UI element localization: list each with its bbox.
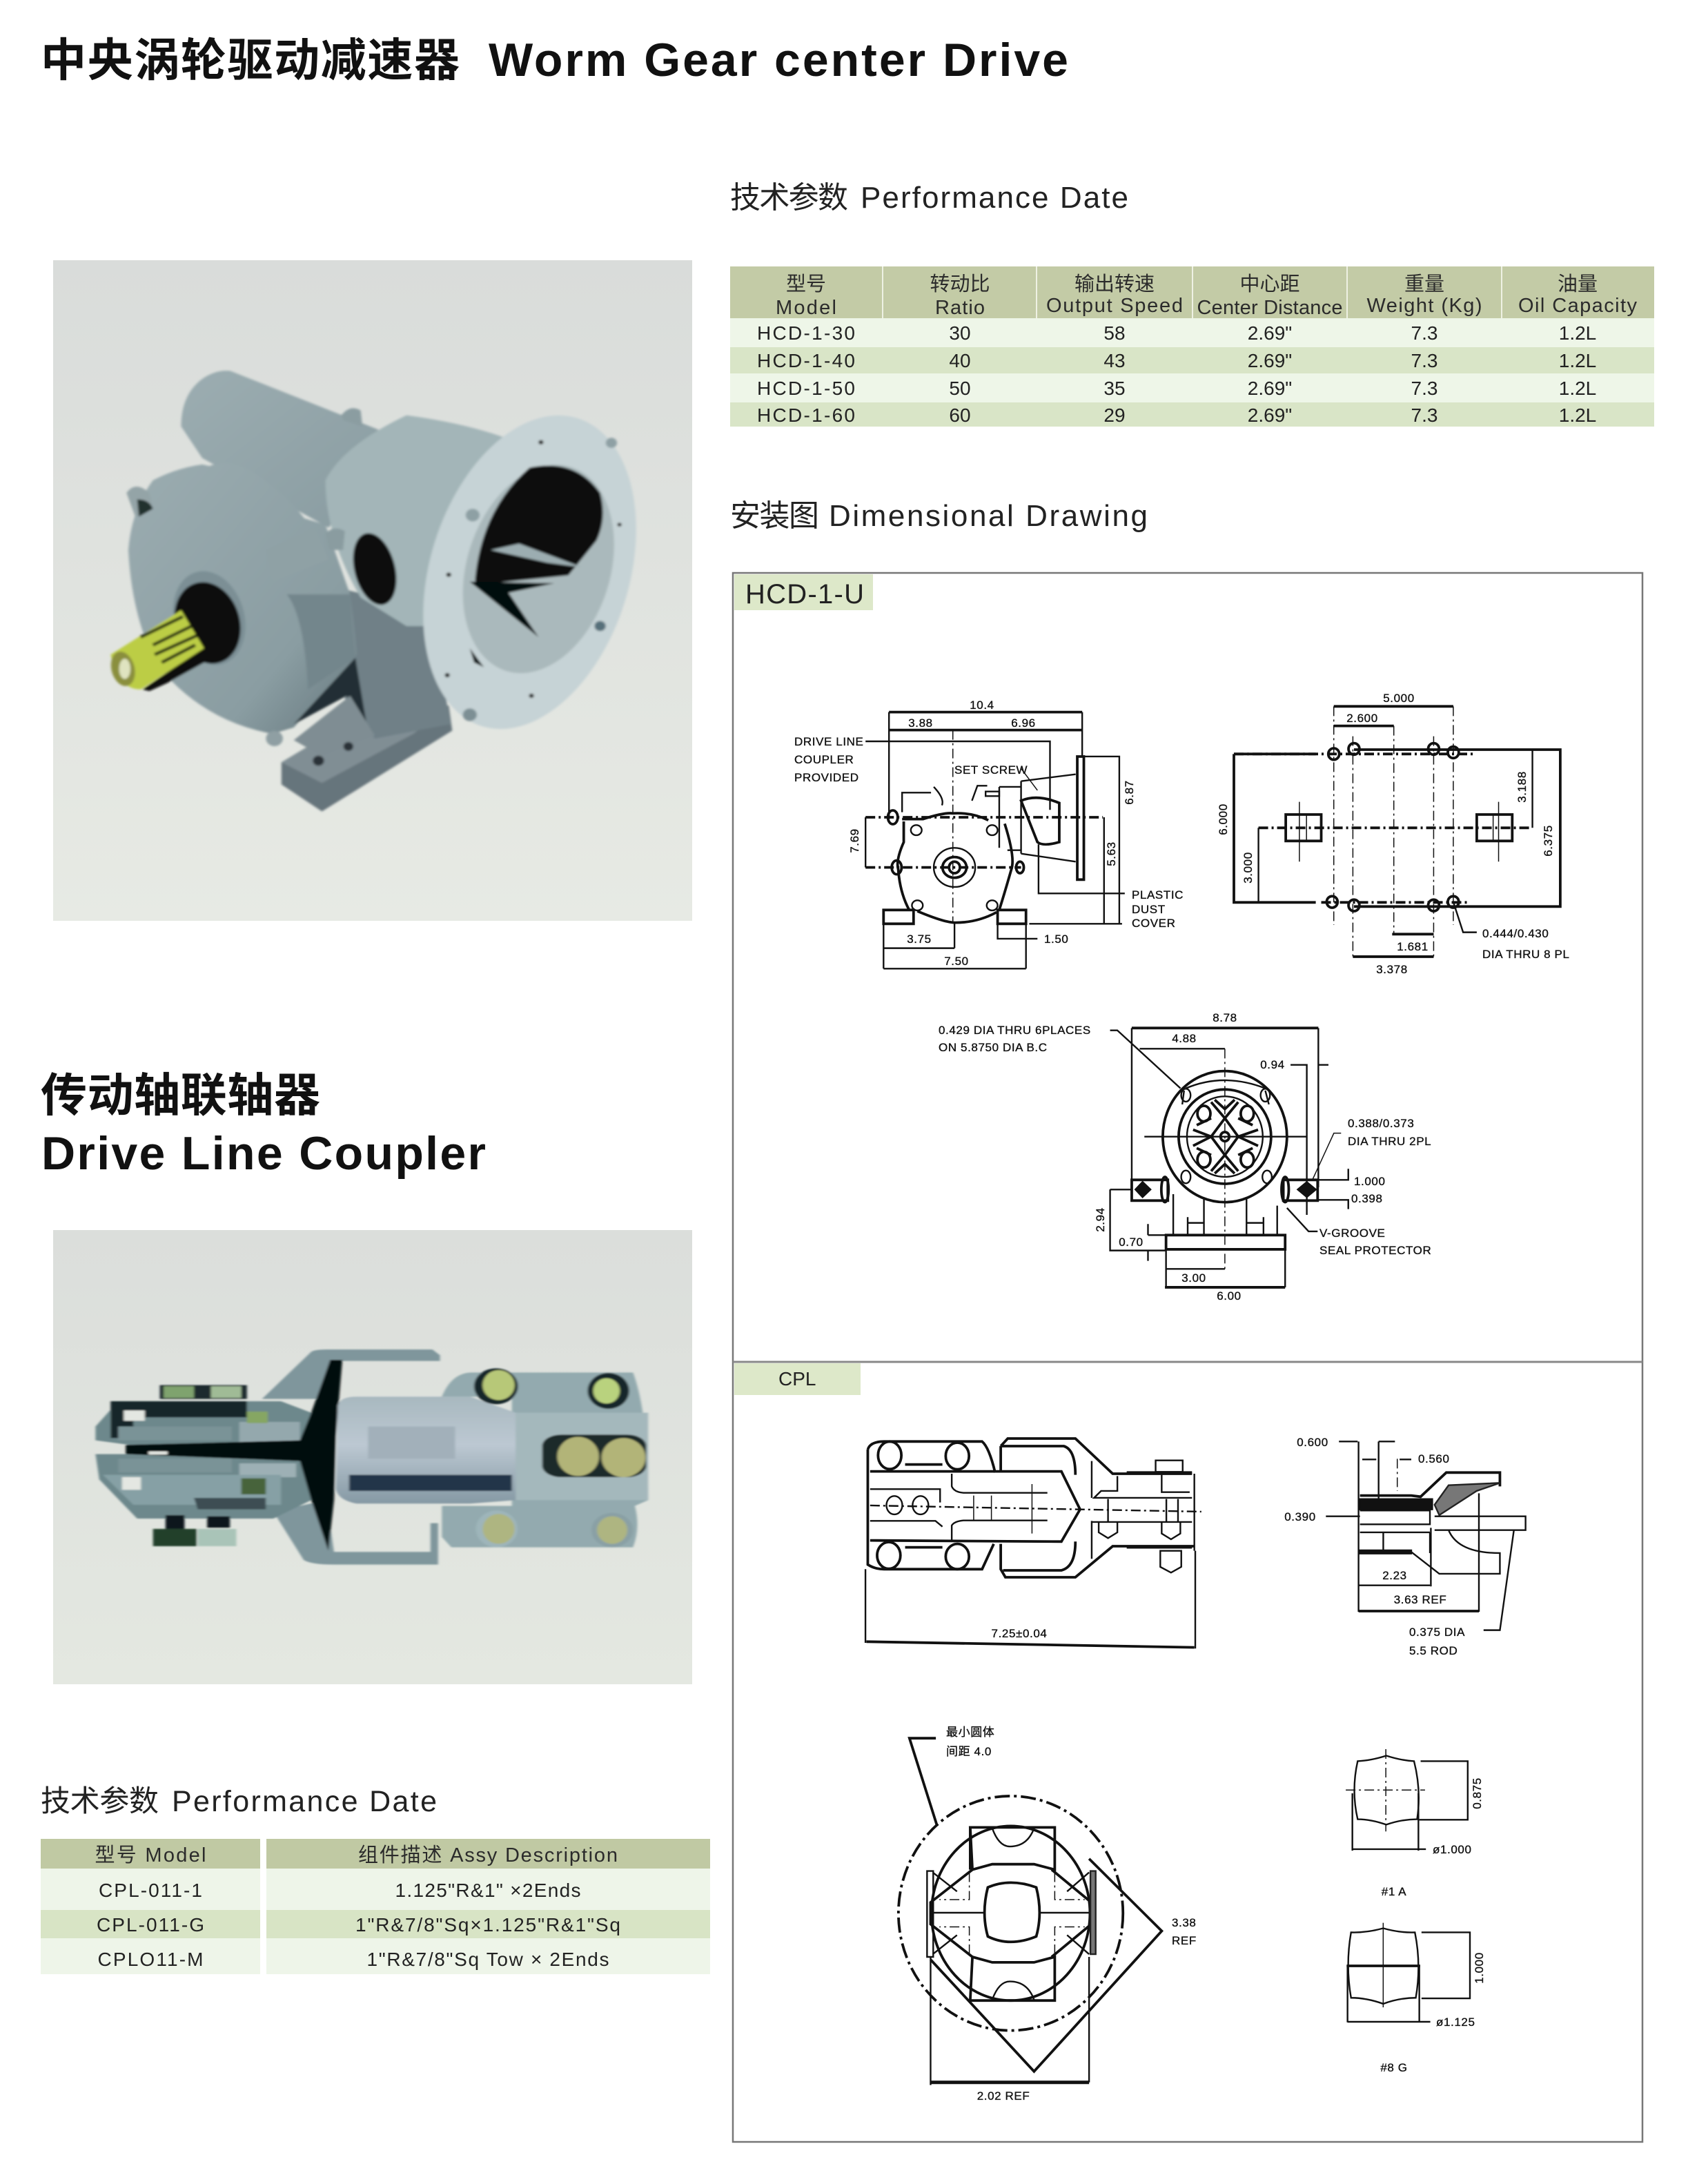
labels: CPL section view: 0.375 DIA: [1409, 1626, 1465, 1639]
title: [41, 34, 1068, 86]
coupler table rows: CPLO11-M: [98, 1949, 203, 1970]
labels: side view: COVER: [1132, 917, 1175, 930]
labels: CPL side view: 7.25±0.04: [992, 1627, 1047, 1640]
worm gear table rows: 2.69": [1248, 378, 1292, 399]
worm gear table rows: 7.3: [1411, 378, 1437, 399]
labels: side view: 7.69: [848, 828, 861, 853]
drawing: HCD-1-U bottom view: [1217, 692, 1570, 976]
worm gear table header: 中心距: [1239, 273, 1300, 295]
labels: side view: PLASTIC: [1132, 888, 1184, 901]
worm gear table header: 油量: [1558, 273, 1598, 295]
drawing: HCD-1-U side view: [794, 699, 1184, 968]
labels: CPL section view: 2.23: [1382, 1569, 1407, 1582]
worm gear table header: Output Speed: [1046, 295, 1183, 317]
labels: side view: PROVIDED: [794, 771, 859, 784]
labels: CPL section view: [1284, 1436, 1465, 1657]
labels: side view: COUPLER: [794, 753, 854, 766]
labels: CPL end view: REF: [1172, 1934, 1197, 1947]
worm gear table header: 型号: [786, 273, 826, 295]
worm gear table rows: HCD-1-60: [757, 404, 855, 426]
worm gear table rows: 43: [1103, 350, 1126, 371]
photo: worm gear drive: [53, 260, 692, 921]
title: 中央涡轮驱动减速器: [41, 35, 460, 86]
tab: HCD-1-U: HCD-1-U: [745, 579, 864, 610]
drawing: CPL side view: [865, 1439, 1201, 1648]
worm gear table rows: HCD-1-50: [757, 378, 855, 399]
labels: CPL section view: 0.600: [1297, 1436, 1328, 1449]
heading: performance data bottom: 技术参数: [41, 1785, 159, 1818]
labels: CPL end view: 3.38: [1172, 1916, 1197, 1929]
labels: side view: [794, 699, 1184, 968]
worm gear table header: 重量: [1404, 273, 1444, 295]
worm gear table header: 输出转速: [1074, 273, 1155, 295]
labels: side view: 5.63: [1105, 841, 1118, 866]
worm gear table rows: 60: [949, 404, 971, 426]
coupler table rows: CPL-011-G: [97, 1914, 204, 1936]
labels: side view: DRIVE LINE: [794, 735, 863, 748]
heading: dimensional drawing: Dimensional Drawing: [829, 499, 1148, 533]
labels: bottom view: 2.600: [1346, 712, 1378, 725]
coupler table header: 组件描述 Assy Description: [358, 1844, 618, 1866]
worm gear table header: Model: [776, 297, 836, 319]
labels: bottom view: 3.378: [1376, 963, 1408, 976]
table: coupler performance data: [41, 1839, 710, 1974]
worm gear table rows: 2.69": [1248, 404, 1292, 426]
coupler table rows: 1"R&7/8"Sq Tow × 2Ends: [367, 1949, 609, 1970]
heading: drive line coupler: [41, 1070, 486, 1180]
labels: shaft section #8 G: #8 G: [1380, 2061, 1408, 2074]
labels: front view: 0.398: [1351, 1192, 1383, 1205]
labels: side view: 6.87: [1123, 780, 1136, 805]
labels: front view: 0.94: [1260, 1058, 1285, 1071]
labels: front view: ON 5.8750 DIA B.C: [939, 1041, 1048, 1054]
labels: side view: 1.50: [1044, 933, 1068, 946]
worm gear table rows: 2.69": [1248, 322, 1292, 344]
worm gear table header: Center Distance: [1197, 297, 1343, 319]
labels: CPL section view: 3.63 REF: [1394, 1593, 1446, 1606]
labels: side view: 6.96: [1011, 716, 1036, 730]
labels: bottom view: 6.000: [1217, 803, 1230, 835]
labels: shaft section #1 A: [1382, 1777, 1484, 1898]
labels: front view: 8.78: [1213, 1011, 1237, 1024]
labels: side view: 3.88: [908, 716, 933, 730]
labels: bottom view: 1.681: [1397, 940, 1429, 953]
labels: front view: 4.88: [1172, 1032, 1197, 1045]
title: Worm Gear center Drive: [489, 34, 1068, 86]
coupler table rows: 1"R&7/8"Sq×1.125"R&1"Sq: [355, 1914, 620, 1936]
panel: dimensional drawings frame: [733, 573, 1642, 2142]
labels: bottom view: [1217, 692, 1570, 976]
worm gear table rows: 1.2L: [1559, 378, 1596, 399]
worm gear table header: 转动比: [930, 273, 990, 295]
labels: side view: DUST: [1132, 903, 1166, 916]
table: worm gear performance data: [730, 266, 1654, 427]
labels: front view: V-GROOVE: [1319, 1227, 1386, 1240]
labels: CPL section view: 5.5 ROD: [1409, 1644, 1458, 1657]
labels: front view: 6.00: [1217, 1289, 1242, 1303]
labels: CPL end view: 最小圆体: [946, 1726, 994, 1739]
labels: side view: 7.50: [944, 955, 969, 968]
worm gear table rows: HCD-1-30: [757, 322, 855, 344]
heading: performance data bottom: [41, 1785, 437, 1818]
heading: drive line coupler: 传动轴联轴器: [41, 1070, 320, 1122]
drawing: CPL end view: [899, 1726, 1197, 2103]
labels: bottom view: 5.000: [1383, 692, 1415, 705]
labels: front view: 0.388/0.373: [1348, 1117, 1414, 1130]
worm gear table rows: 1.2L: [1559, 404, 1596, 426]
labels: bottom view: DIA THRU 8 PL: [1482, 948, 1570, 961]
worm gear table rows: 7.3: [1411, 350, 1437, 371]
coupler table header: [95, 1844, 618, 1866]
drawing: CPL section view: [1284, 1436, 1526, 1657]
coupler table rows: 1.125"R&1" ×2Ends: [395, 1880, 581, 1901]
coupler table rows: CPL-011-1: [99, 1880, 202, 1901]
worm gear table rows: 7.3: [1411, 404, 1437, 426]
labels: front view: [939, 1011, 1431, 1303]
worm gear table rows: 2.69": [1248, 350, 1292, 371]
worm gear table header: Ratio: [935, 297, 985, 319]
coupler table header: 型号 Model: [95, 1844, 206, 1866]
labels: side view: 3.75: [907, 933, 932, 946]
tab: CPL: [734, 1363, 861, 1395]
worm gear table rows: 35: [1103, 378, 1126, 399]
photo: drive line coupler: [53, 1230, 692, 1684]
labels: front view: 1.000: [1354, 1175, 1386, 1188]
worm gear table header: [776, 273, 1637, 319]
heading: performance data top: Performance Date: [861, 181, 1128, 215]
labels: front view: DIA THRU 2PL: [1348, 1135, 1431, 1148]
worm gear table rows: 7.3: [1411, 322, 1437, 344]
heading: performance data top: [730, 181, 1128, 215]
worm gear table rows: 29: [1103, 404, 1126, 426]
labels: bottom view: 3.000: [1242, 852, 1255, 884]
labels: shaft section #8 G: ø1.125: [1436, 2016, 1475, 2029]
worm gear table header: Oil Capacity: [1518, 295, 1637, 317]
coupler table rows: [97, 1880, 620, 1970]
labels: CPL section view: 0.390: [1284, 1510, 1316, 1523]
heading: performance data bottom: Performance Date: [172, 1785, 437, 1818]
drawing: HCD-1-U front view: [939, 1011, 1431, 1303]
labels: shaft section #1 A: ø1.000: [1433, 1843, 1472, 1856]
worm gear table rows: 40: [949, 350, 971, 371]
drawing: shaft section #8 G: [1346, 1923, 1486, 2074]
worm gear table rows: 1.2L: [1559, 322, 1596, 344]
worm gear table rows: 58: [1103, 322, 1126, 344]
worm gear table rows: 50: [949, 378, 971, 399]
labels: front view: 0.70: [1119, 1236, 1144, 1249]
labels: bottom view: 6.375: [1542, 825, 1555, 857]
labels: bottom view: 3.188: [1515, 771, 1529, 803]
labels: CPL section view: 0.560: [1418, 1452, 1450, 1465]
heading: performance data top: 技术参数: [730, 181, 848, 215]
labels: front view: 0.429 DIA THRU 6PLACES: [939, 1024, 1091, 1037]
labels: shaft section #8 G: 1.000: [1473, 1952, 1486, 1984]
tab: CPL: CPL: [778, 1368, 816, 1390]
worm gear table rows: [757, 322, 1596, 426]
labels: CPL end view: [946, 1726, 1197, 2103]
labels: side view: SET SCREW: [954, 763, 1028, 777]
labels: front view: 3.00: [1181, 1271, 1206, 1285]
worm gear table rows: 1.2L: [1559, 350, 1596, 371]
worm gear table rows: HCD-1-40: [757, 350, 855, 371]
labels: shaft section #1 A: 0.875: [1471, 1777, 1484, 1809]
labels: shaft section #8 G: [1380, 1952, 1486, 2074]
worm gear table header: Weight (Kg): [1366, 295, 1482, 317]
labels: front view: 2.94: [1094, 1207, 1107, 1232]
labels: CPL end view: 间距 4.0: [946, 1745, 992, 1758]
labels: shaft section #1 A: #1 A: [1382, 1885, 1406, 1898]
labels: CPL end view: 2.02 REF: [977, 2089, 1030, 2103]
heading: dimensional drawing: 安装图: [730, 499, 819, 533]
worm gear table rows: 30: [949, 322, 971, 344]
drawing: shaft section #1 A: [1346, 1749, 1484, 1898]
labels: bottom view: 0.444/0.430: [1482, 927, 1549, 940]
labels: side view: 10.4: [970, 699, 994, 712]
heading: drive line coupler: Drive Line Coupler: [41, 1127, 486, 1180]
labels: front view: SEAL PROTECTOR: [1319, 1244, 1431, 1257]
